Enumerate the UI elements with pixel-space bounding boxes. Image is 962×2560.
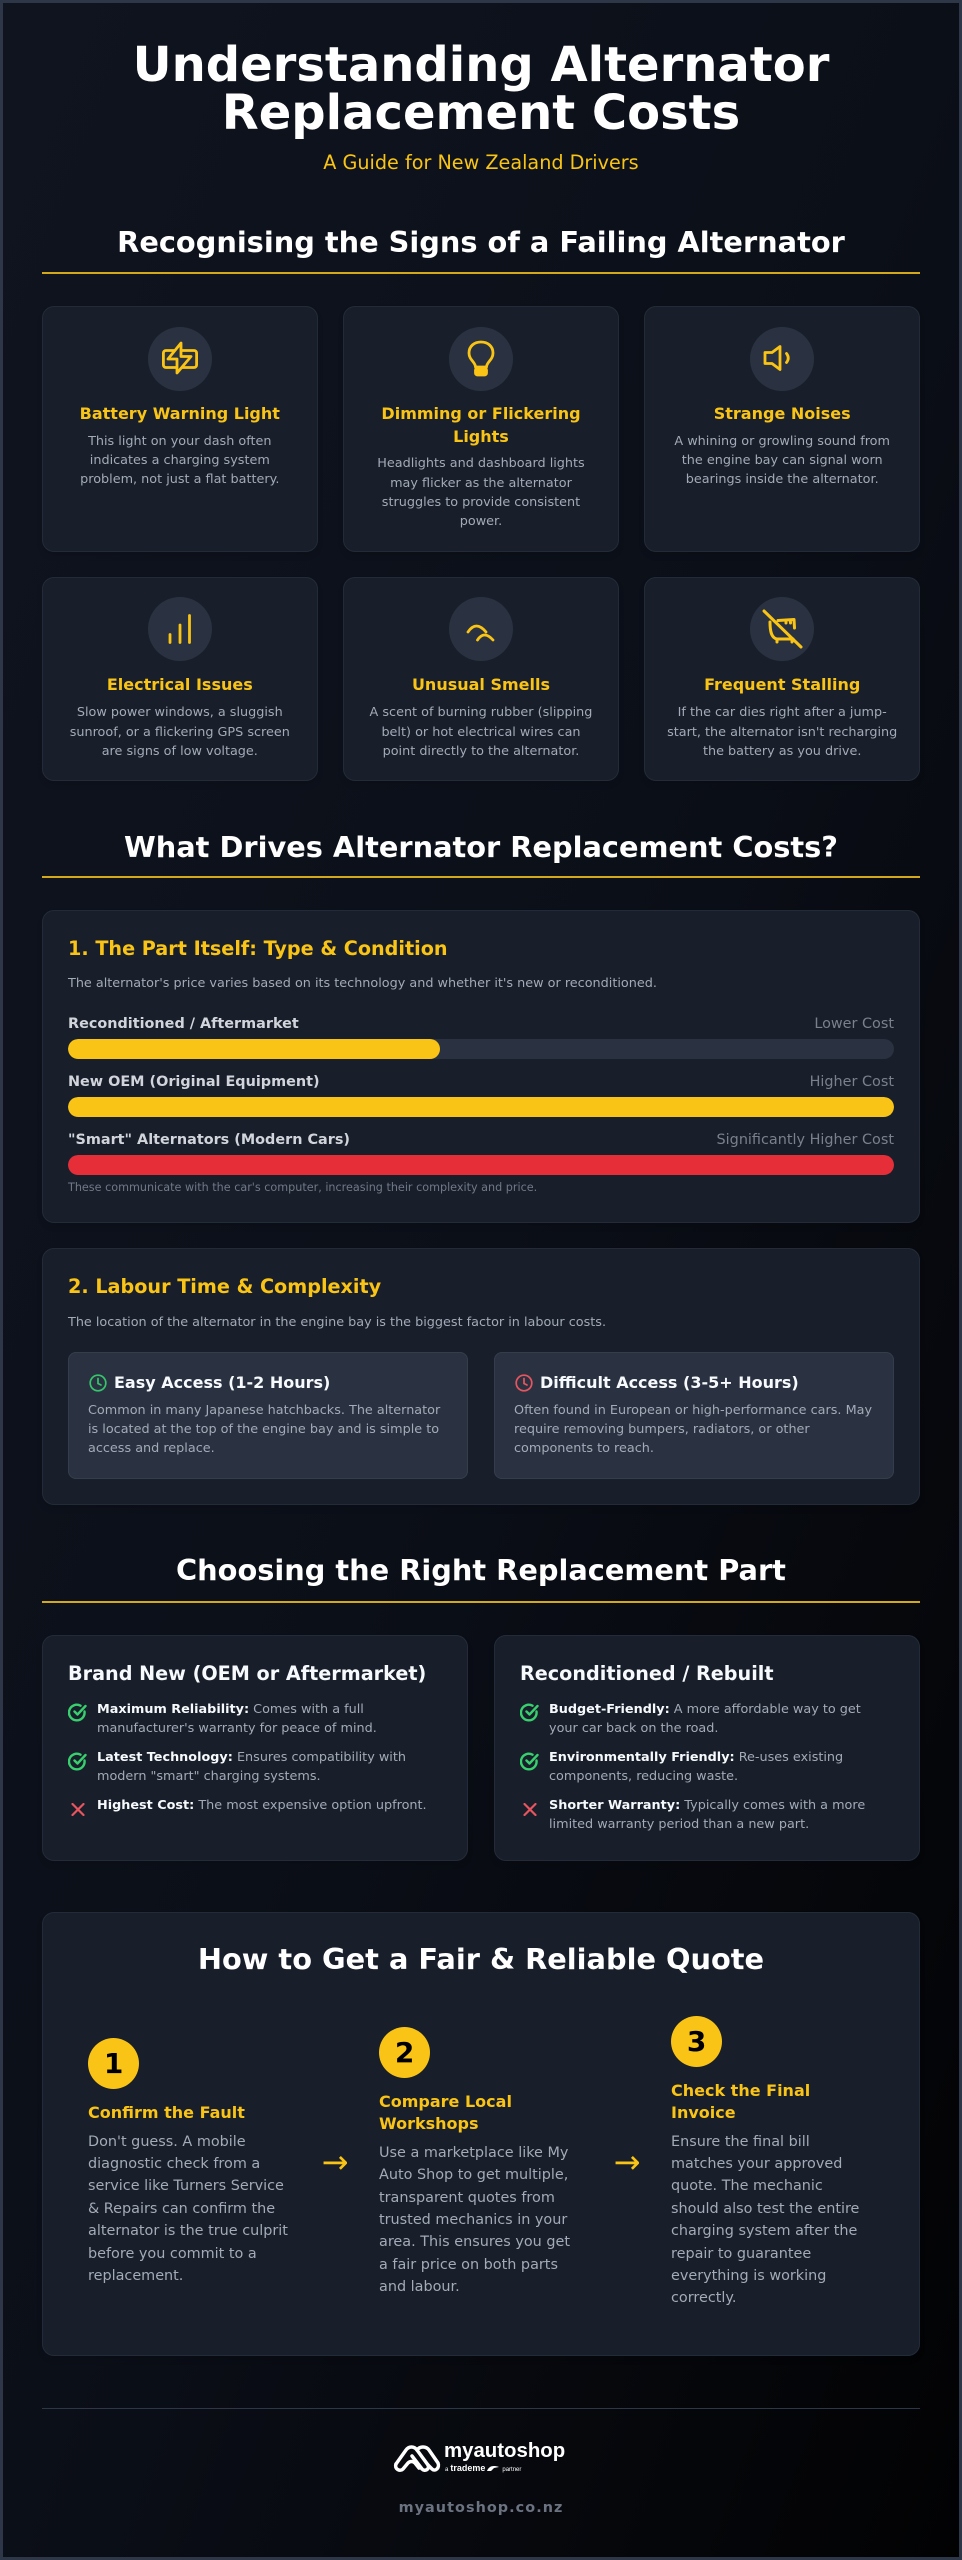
card title — [381, 404, 581, 446]
list item: Shorter Warranty: Typically comes with a more — [549, 1798, 865, 1813]
card text — [370, 705, 592, 759]
card text: the engine bay can signal worn — [682, 453, 883, 468]
icon: battery with bolt — [148, 327, 212, 391]
bar label: reconditioned: Reconditioned / Aftermarket — [68, 1016, 299, 1032]
footer url: myautoshop.co.nz — [399, 2500, 563, 2516]
step 3 text — [671, 2134, 859, 2306]
list item — [549, 1798, 865, 1832]
card text: are signs of low voltage. — [102, 744, 258, 759]
title: Understanding Alternator — [133, 37, 829, 93]
bar: smart alternators — [68, 1155, 894, 1175]
panel: reconditioned — [494, 1635, 920, 1861]
list item: modern "smart" charging systems. — [97, 1769, 321, 1784]
card text — [674, 434, 890, 487]
step 3 text: should also test the entire — [671, 2201, 859, 2217]
panel: strange noises — [644, 306, 920, 552]
card text: power. — [460, 514, 502, 529]
bar label: smart alternators: "Smart" Alternators (Modern Cars) — [68, 1132, 350, 1148]
step 1 text — [88, 2134, 288, 2284]
sub-panel text: Common in many Japanese hatchbacks. The alternator — [88, 1403, 440, 1418]
step 2 text: trusted mechanics in your — [379, 2212, 567, 2228]
logo tagline: atrademe partner — [445, 2463, 521, 2473]
panel heading: Brand New (OEM or Aftermarket) — [68, 1662, 426, 1685]
icon: light bulb — [449, 327, 513, 391]
arrow: step 1 to 2: → — [322, 2143, 348, 2181]
title — [133, 37, 830, 141]
sub-panel text — [88, 1403, 440, 1456]
card text: belt) or hot electrical wires can — [381, 724, 581, 740]
card text — [377, 456, 585, 529]
card text — [70, 705, 290, 759]
step 2 text: a fair price on both parts — [379, 2257, 558, 2273]
panel intro: The alternator's price varies based on its technology and whether it's new or reconditioned. — [68, 976, 657, 991]
panel: unusual smells — [343, 577, 619, 781]
list item: Budget-Friendly: A more affordable way to get — [549, 1702, 861, 1717]
arrow: step 2 to 3: → — [614, 2143, 640, 2181]
list item — [97, 1702, 377, 1736]
panel: battery warning light — [42, 306, 318, 552]
icon: smell arcs — [449, 597, 513, 661]
step 3 title: Invoice — [671, 2103, 736, 2122]
subtitle: A Guide for New Zealand Drivers — [323, 151, 639, 174]
card text: struggles to provide consistent — [382, 495, 580, 510]
icon: cross — [523, 1803, 537, 1816]
card text: A scent of burning rubber (slipping — [370, 705, 592, 720]
icon: check — [68, 1752, 87, 1770]
card text: This light on your dash often — [88, 434, 272, 449]
icon: green clock — [89, 1374, 107, 1392]
card title: Lights — [453, 427, 509, 446]
panel: labour time — [42, 1248, 920, 1505]
icon: cross — [71, 1803, 85, 1816]
card title: Strange Noises — [714, 404, 851, 423]
step 3 text: Ensure the final bill — [671, 2134, 810, 2150]
card text — [80, 434, 279, 487]
bar footnote: These communicate with the car's computer, increasing their complexity and price. — [68, 1181, 537, 1194]
card title: Dimming or Flickering — [381, 404, 581, 423]
bar value: lower cost: Lower Cost — [814, 1016, 894, 1032]
logo: myautoshop — [394, 2440, 565, 2473]
icon: check — [68, 1704, 87, 1722]
list item: your car back on the road. — [549, 1721, 718, 1736]
icon: red clock — [515, 1374, 533, 1392]
list item: Environmentally Friendly: Re-uses existing — [549, 1750, 843, 1765]
list item — [97, 1750, 406, 1784]
sub-panel text: access and replace. — [88, 1441, 215, 1456]
panel heading: Reconditioned / Rebuilt — [520, 1662, 774, 1685]
card text: start, the alternator isn't recharging — [667, 724, 897, 740]
step 2 text: transparent quotes from — [379, 2190, 555, 2206]
icon: stalled engine struck through — [750, 597, 814, 661]
card text: If the car dies right after a jump- — [678, 705, 887, 720]
icon: check — [520, 1752, 539, 1770]
step 3 text: correctly. — [671, 2290, 736, 2306]
heading: cost drivers section: What Drives Alternator Replacement Costs? — [124, 830, 838, 864]
panel: brand new — [42, 1635, 468, 1861]
card text: problem, not just a flat battery. — [80, 472, 279, 487]
list item: components, reducing waste. — [549, 1769, 738, 1784]
step 1 text: service like Turners Service — [88, 2178, 284, 2194]
icon: speaker — [750, 327, 814, 391]
card text: Headlights and dashboard lights — [377, 456, 585, 471]
step 1 text: diagnostic check from a — [88, 2156, 260, 2172]
step 1 text: before you commit to a — [88, 2246, 257, 2262]
list item: Maximum Reliability: Comes with a full — [97, 1702, 364, 1717]
step 2 title: Workshops — [379, 2114, 478, 2133]
card title: Frequent Stalling — [704, 675, 860, 694]
card text: bearings inside the alternator. — [686, 472, 879, 487]
step 3 title: Check the Final — [671, 2081, 810, 2100]
step 2 text: area. This ensures you get — [379, 2234, 570, 2250]
list item — [549, 1750, 843, 1784]
step 1 title: Confirm the Fault — [88, 2103, 245, 2122]
card text: indicates a charging system — [90, 453, 270, 468]
step 3 number — [671, 2016, 722, 2067]
bar: new OEM — [68, 1097, 894, 1117]
icon: signal bars — [148, 597, 212, 661]
panel heading: 1. The Part Itself: Type & Condition — [68, 937, 448, 960]
step 2 text: Use a marketplace like My — [379, 2145, 568, 2161]
heading: choosing a part section: Choosing the Right Replacement Part — [176, 1553, 786, 1587]
step 2 text — [379, 2145, 570, 2295]
step 3 text: quote. The mechanic — [671, 2178, 823, 2194]
list item: limited warranty period than a new part. — [549, 1817, 809, 1832]
sub-panel text: is located at the top of the engine bay and is simple to — [88, 1422, 439, 1437]
step 1 number — [88, 2038, 139, 2089]
bar: reconditioned — [68, 1039, 894, 1059]
card title: Electrical Issues — [107, 675, 253, 694]
step 3 text: repair to guarantee — [671, 2246, 811, 2262]
step 2 text: and labour. — [379, 2279, 460, 2295]
card title: Battery Warning Light — [80, 404, 280, 423]
step 3 number: 3 — [687, 2025, 706, 2058]
heading: signs section: Recognising the Signs of a Failing Alternator — [117, 225, 845, 259]
card text: Slow power windows, a sluggish — [77, 705, 283, 720]
panel: frequent stalling — [644, 577, 920, 781]
bar label: new OEM: New OEM (Original Equipment) — [68, 1074, 320, 1090]
sub-panel text: components to reach. — [514, 1441, 654, 1456]
logo wordmark: myautoshop — [444, 2440, 565, 2462]
sub-panel heading: Easy Access (1-2 Hours) — [114, 1373, 330, 1392]
step 1 text: replacement. — [88, 2268, 183, 2284]
panel: the part itself — [42, 910, 920, 1223]
sub-panel: easy access — [68, 1352, 468, 1479]
list item: Latest Technology: Ensures compatibility with — [97, 1750, 406, 1765]
list item: Highest Cost: The most expensive option upfront. — [97, 1798, 427, 1813]
card text — [667, 705, 897, 759]
card text: point directly to the alternator. — [383, 744, 579, 759]
step 2 number — [379, 2027, 430, 2078]
list item: manufacturer's warranty for peace of mind. — [97, 1721, 377, 1736]
step 2 title: Compare Local — [379, 2092, 512, 2111]
card text: sunroof, or a flickering GPS screen — [70, 724, 290, 740]
sub-panel: difficult access — [494, 1352, 894, 1479]
logo mark — [394, 2445, 440, 2472]
sub-panel heading: Difficult Access (3-5+ Hours) — [540, 1373, 799, 1392]
step 1 text: alternator is the true culprit — [88, 2223, 288, 2239]
panel heading: How to Get a Fair & Reliable Quote — [198, 1942, 764, 1976]
icon: check — [520, 1704, 539, 1722]
step 3 text: everything is working — [671, 2268, 826, 2284]
step 2 title — [379, 2092, 512, 2133]
panel: dimming lights — [343, 306, 619, 552]
step 1 text: Don't guess. A mobile — [88, 2134, 246, 2150]
step 1 text: & Repairs can confirm the — [88, 2201, 275, 2217]
step 2 number: 2 — [395, 2036, 414, 2069]
step 3 title — [671, 2081, 810, 2122]
panel: quote steps — [42, 1912, 920, 2356]
card title: Unusual Smells — [412, 675, 550, 694]
panel heading: 2. Labour Time & Complexity — [68, 1275, 381, 1298]
card text: A whining or growling sound from — [674, 434, 890, 449]
card text: the battery as you drive. — [703, 744, 861, 759]
bar value: significantly higher cost: Significantly Higher Cost — [717, 1132, 894, 1148]
step 3 text: matches your approved — [671, 2156, 842, 2172]
bar value: higher cost: Higher Cost — [810, 1074, 894, 1090]
logo bird mark — [487, 2466, 499, 2471]
title: Replacement Costs — [222, 85, 740, 141]
step 1 number: 1 — [104, 2047, 123, 2080]
step 3 text: charging system after the — [671, 2223, 857, 2239]
sub-panel text: require removing bumpers, radiators, or other — [514, 1422, 810, 1437]
step 2 text: Auto Shop to get multiple, — [379, 2167, 568, 2183]
panel intro: The location of the alternator in the engine bay is the biggest factor in labour costs. — [68, 1315, 606, 1330]
sub-panel text — [514, 1403, 872, 1456]
sub-panel text: Often found in European or high-performance cars. May — [514, 1403, 872, 1418]
list item — [549, 1702, 861, 1736]
card text: may flicker as the alternator — [390, 476, 572, 490]
panel: electrical issues — [42, 577, 318, 781]
